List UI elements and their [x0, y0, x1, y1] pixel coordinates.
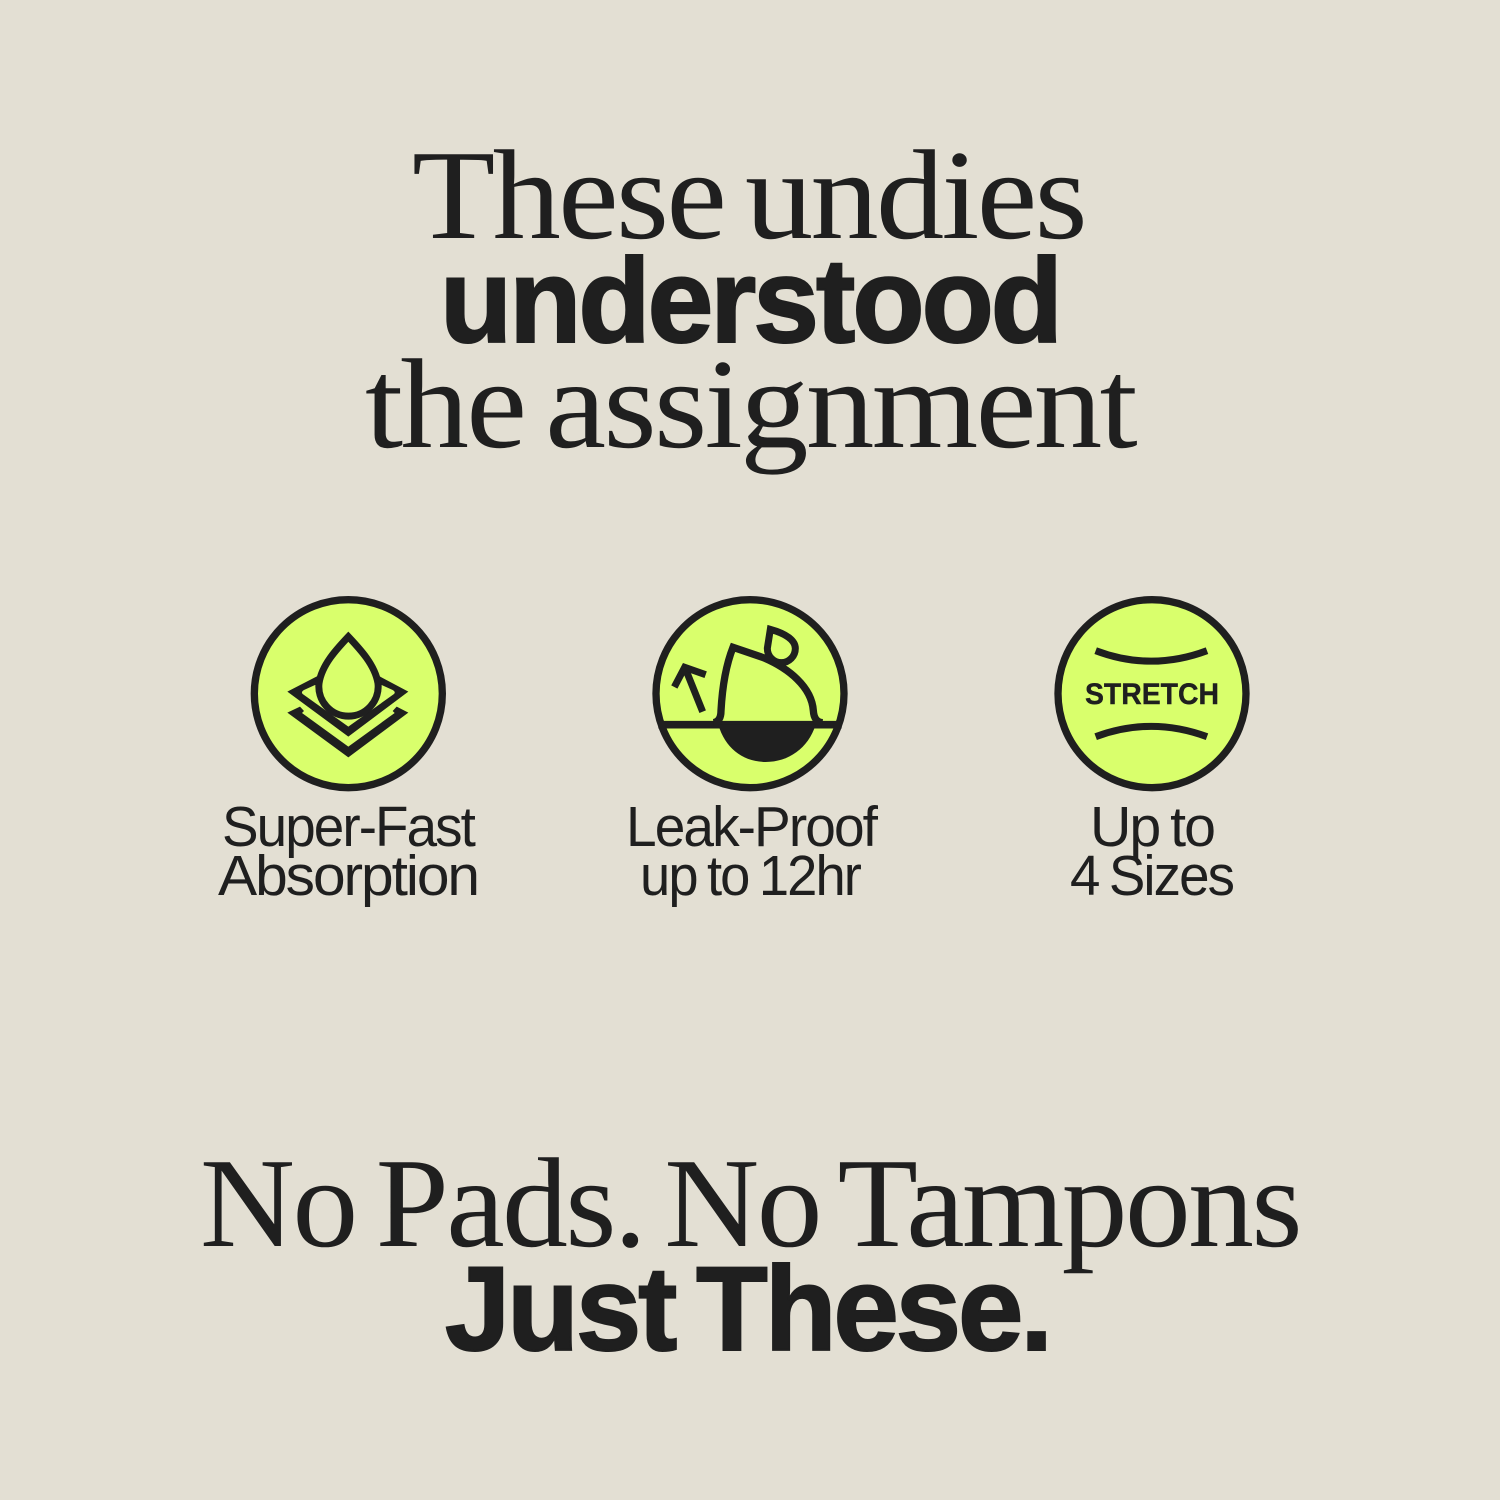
- icon: leak barrier with arrow: [656, 600, 844, 788]
- icon text: stretch: STRETCH: [1085, 678, 1219, 711]
- label: up to 4 sizes: Up to: [1090, 795, 1214, 859]
- label: up to 4 sizes: [1070, 795, 1233, 908]
- label: super-fast absorption: Super-Fast: [222, 795, 476, 859]
- label: leak-proof up to 12hr: up to 12hr: [640, 844, 862, 908]
- title: [365, 124, 1137, 475]
- feature: leak-proof: [626, 600, 878, 908]
- feature: super-fast absorption: [218, 600, 478, 908]
- label: leak-proof up to 12hr: [626, 795, 878, 908]
- label: super-fast absorption: [218, 795, 478, 908]
- icon: stretch: [1058, 600, 1246, 788]
- label: super-fast absorption: Absorption: [218, 844, 478, 908]
- feature: stretch sizes: [1058, 600, 1246, 908]
- title: These undies: [412, 124, 1085, 266]
- label: leak-proof up to 12hr: Leak-Proof: [626, 795, 878, 859]
- closing statement: No Pads. No Tampons: [200, 1132, 1300, 1274]
- title: the assignment: [365, 333, 1137, 475]
- label: up to 4 sizes: 4 Sizes: [1070, 844, 1233, 908]
- closing statement: [200, 1132, 1300, 1376]
- icon: droplet on absorbent layers: [254, 600, 442, 788]
- title: understood: [440, 234, 1060, 368]
- closing statement: Just These.: [445, 1242, 1050, 1376]
